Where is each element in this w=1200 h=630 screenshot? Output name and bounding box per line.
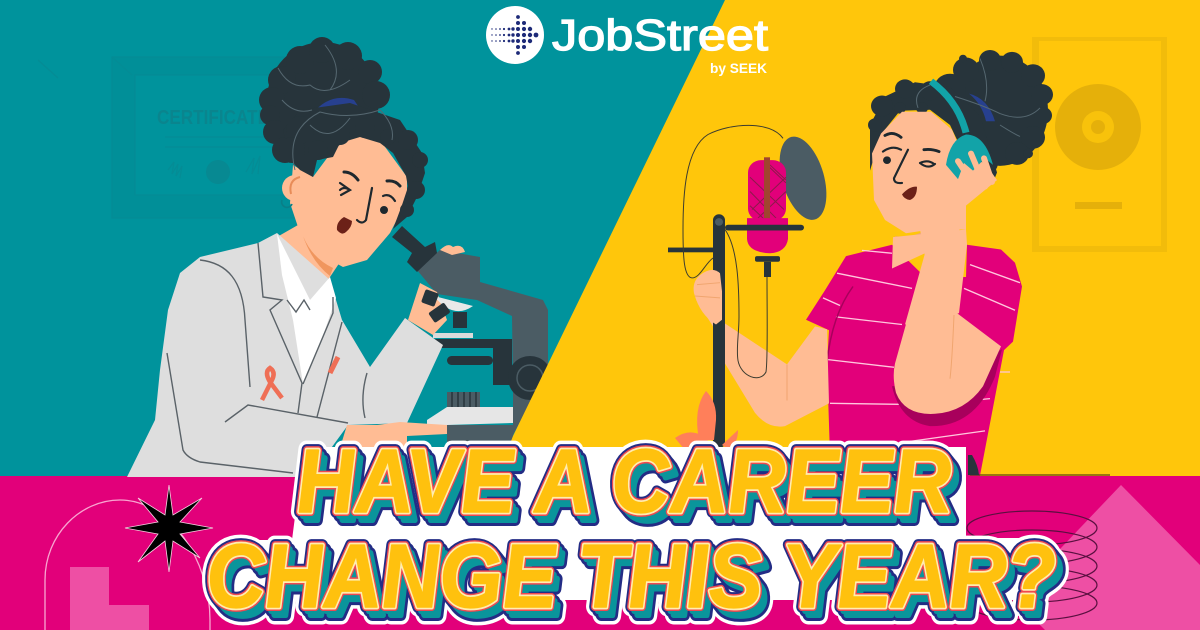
- title navy extrusion: [199, 431, 1065, 630]
- panel: pink lower band: [0, 476, 1200, 630]
- singer hand on stand: [694, 270, 722, 325]
- floor and desk line: [968, 455, 1110, 475]
- title navy extrusion: CHANGE THIS YEAR?: [204, 526, 1059, 627]
- singer shirt stripes: [823, 250, 1020, 441]
- headphones: [931, 81, 993, 179]
- microscope: [392, 226, 552, 445]
- title teal extrusion: CHANGE THIS YEAR?: [207, 530, 1062, 630]
- title yellow letters: HAVE A CAREER: [294, 431, 954, 532]
- title navy extrusion: CHANGE THIS YEAR?: [207, 530, 1062, 630]
- faded certificate on wall: CERTIFICATE: [157, 107, 269, 129]
- microscope rib lines: [452, 392, 476, 407]
- singer sleeve seam: [827, 286, 853, 363]
- title white outline: CHANGE THIS YEAR?: [204, 526, 1059, 627]
- title teal extrusion: HAVE A CAREER: [300, 439, 960, 540]
- singer hair tie: [969, 94, 995, 121]
- decorative starburst: [125, 485, 213, 572]
- singer neck shadow: [895, 226, 932, 239]
- scientist character: [127, 37, 473, 477]
- singer lower arm shadow: [892, 349, 1002, 426]
- microscope eyepiece: [392, 226, 437, 272]
- title navy extrusion: HAVE A CAREER: [300, 439, 960, 540]
- singer forearm and hand: [894, 154, 1001, 414]
- title cream inline: [199, 431, 1059, 627]
- pop filter: [771, 132, 835, 225]
- title teal extrusion: HAVE A CAREER: [297, 435, 957, 536]
- scientist hair tie: [312, 98, 358, 116]
- scientist face: [290, 135, 407, 267]
- scientist ear: [282, 175, 308, 201]
- scientist front hair: [279, 103, 428, 229]
- microscope focus ribs: [447, 392, 480, 407]
- microscope stage and knobs: [425, 312, 552, 400]
- title navy extrusion: HAVE A CAREER: [294, 431, 954, 532]
- title red outline: [199, 431, 1059, 627]
- title yellow letters: [199, 431, 1059, 627]
- title backing: [225, 447, 1030, 600]
- title white outline: HAVE A CAREER: [294, 431, 954, 532]
- title red outline: HAVE A CAREER: [294, 431, 954, 532]
- scientist facial features: [340, 172, 400, 222]
- singer character: [668, 50, 1053, 486]
- scientist hair curls: [278, 45, 392, 170]
- logo circle with arrow dots: [486, 6, 544, 64]
- title cream inline: CHANGE THIS YEAR?: [204, 526, 1059, 627]
- title teal extrusion: [202, 435, 1065, 630]
- singer mouth: [902, 187, 917, 200]
- microscope body and arm: [417, 250, 548, 435]
- leaf plant: [675, 391, 738, 450]
- decorative pink triangle: [1030, 485, 1200, 630]
- decorative spring coil: [967, 511, 1097, 620]
- logo wordmark: JobStreet: [552, 11, 768, 60]
- title: [199, 431, 1065, 630]
- singer front hair: [868, 79, 998, 180]
- faded certificate on wall: [38, 57, 312, 218]
- microscope knobs and dome: [421, 289, 473, 323]
- microphone stand cross arm: [668, 248, 716, 252]
- title yellow letters: CHANGE THIS YEAR?: [204, 526, 1059, 627]
- singer left arm: [696, 300, 829, 427]
- coat pen: [330, 357, 338, 373]
- scientist neck: [277, 225, 340, 300]
- singer neck and collar: [892, 230, 967, 325]
- title navy extrusion: HAVE A CAREER: [297, 435, 957, 536]
- scientist coat lines: [167, 243, 367, 473]
- scientist hands: [340, 245, 465, 448]
- panel: teal background: [0, 0, 800, 477]
- title white outline: [199, 431, 1065, 630]
- JobStreet logo: [486, 6, 768, 76]
- microscope base: [447, 425, 513, 445]
- scientist lab coat: [127, 233, 443, 477]
- singer facial features: [883, 133, 939, 183]
- microphone stand: [713, 214, 804, 448]
- microphone: [747, 157, 788, 277]
- singer hair bun: [934, 50, 1053, 166]
- singer shirt: [806, 245, 1022, 486]
- logo by SEEK: by SEEK: [710, 60, 767, 76]
- singer fingers over headphones: [958, 154, 992, 192]
- title white outline: HAVE A CAREER: [300, 439, 960, 540]
- scientist hair bun: [259, 37, 390, 163]
- title cream inline: HAVE A CAREER: [294, 431, 954, 532]
- singer hair curls: [916, 59, 1040, 136]
- gold record poster: [1032, 37, 1167, 252]
- singer face: [872, 112, 966, 233]
- panel: yellow diagonal background: [497, 0, 1200, 477]
- scientist shirt: [277, 234, 336, 384]
- ribbon pin: [262, 368, 282, 400]
- microphone cable: [683, 125, 783, 378]
- scientist mouth: [337, 217, 352, 234]
- decorative pink arch and block: [45, 500, 210, 630]
- title red outline: CHANGE THIS YEAR?: [204, 526, 1059, 627]
